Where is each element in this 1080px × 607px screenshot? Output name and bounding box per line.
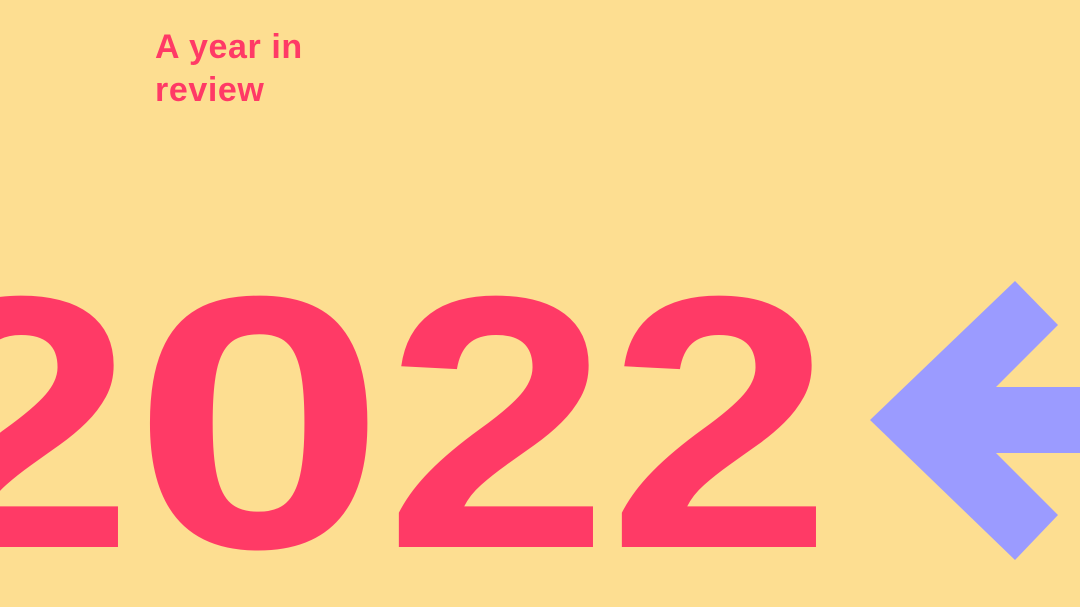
title xyxy=(155,28,303,109)
title: A year in xyxy=(155,28,303,66)
arrow: pointing left xyxy=(870,281,1080,560)
title: review xyxy=(155,71,264,109)
big year number xyxy=(0,221,832,607)
